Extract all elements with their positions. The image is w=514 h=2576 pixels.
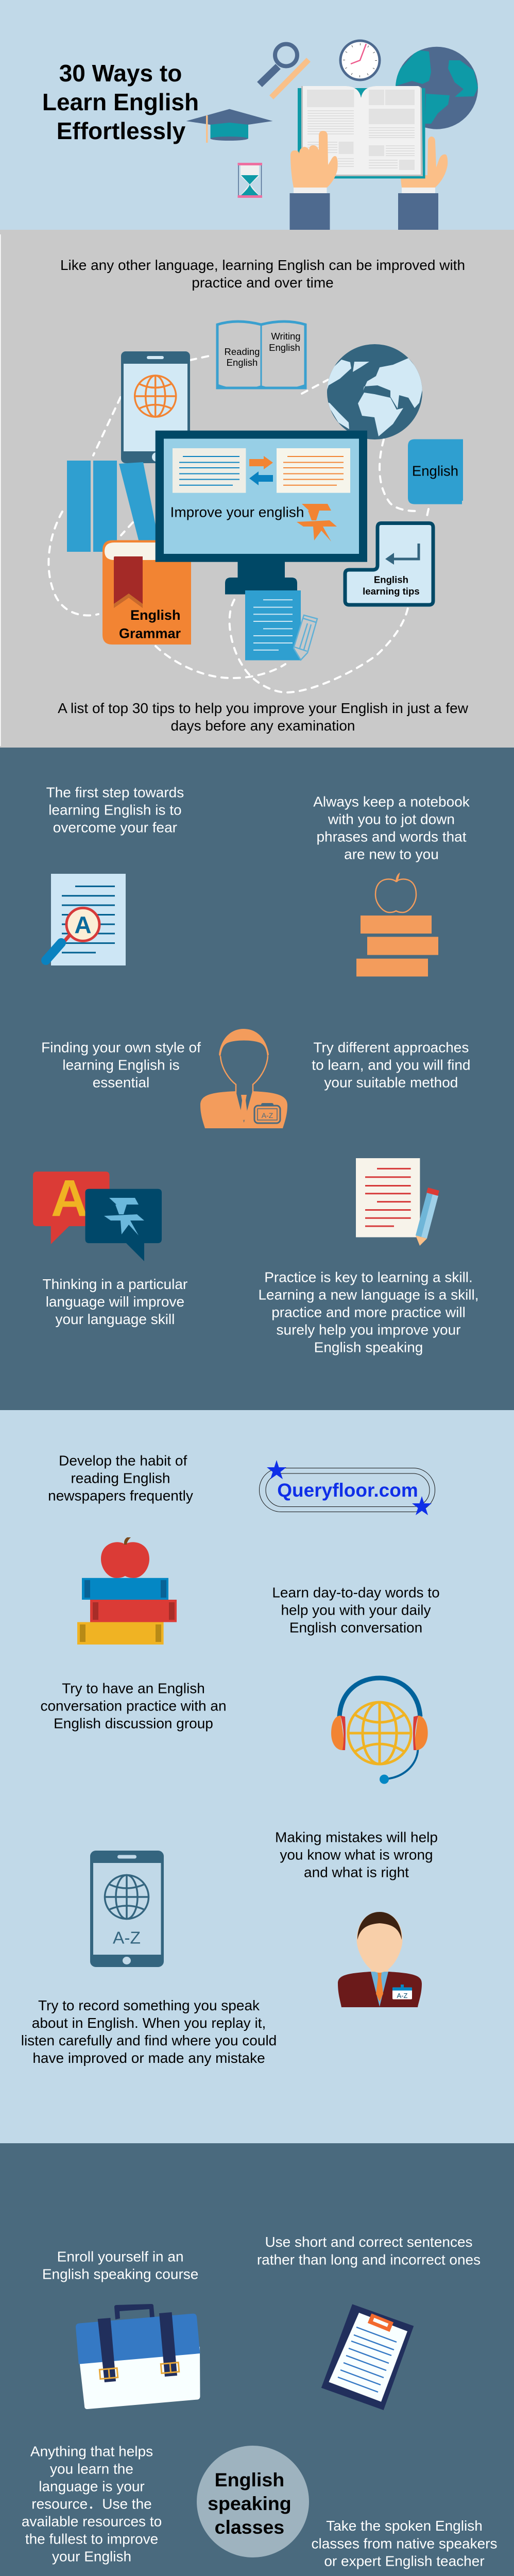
icon: open book with reading and writing labels: English xyxy=(227,357,258,368)
tip: daily words: Learn day-to-day words to xyxy=(272,1585,440,1600)
icon: briefcase xyxy=(76,2304,200,2409)
tip: newspapers: reading English xyxy=(71,1470,170,1486)
panel: header xyxy=(0,0,514,230)
tip: record yourself: about in English. When you replay it, xyxy=(32,2015,266,2031)
tip: notebook xyxy=(313,793,470,862)
tip: resources: your English xyxy=(52,2548,131,2565)
tip: practice: practice and more practice will xyxy=(271,1304,466,1320)
icon: enter key with learning tips xyxy=(345,523,433,605)
icon: headset with globe xyxy=(331,1678,428,1784)
logo: Queryfloor: Queryfloor.com xyxy=(277,1480,418,1501)
tip: practice: English speaking xyxy=(314,1340,423,1355)
translation documents on screen xyxy=(173,448,350,493)
logo: Queryfloor xyxy=(260,1460,435,1515)
tip: notebook: Always keep a notebook xyxy=(313,793,470,810)
icon: computer monitor xyxy=(156,431,367,595)
tip: record yourself: Try to record something you speak xyxy=(38,1997,260,2013)
intro text: practice and over time xyxy=(192,275,334,291)
icon: open book xyxy=(298,86,425,178)
icon: speech bubbles xyxy=(33,1170,162,1261)
tip: discussion group: Try to have an English xyxy=(62,1681,205,1696)
tip: practice xyxy=(258,1269,479,1355)
tip: thinking: Thinking in a particular xyxy=(43,1276,187,1292)
tip: practice: Learning a new language is a skill, xyxy=(258,1287,479,1302)
callout: English speaking classes: classes xyxy=(215,2516,284,2538)
intro text: Like any other language, learning English can be improved with xyxy=(60,257,465,273)
tip: mistakes: you know what is wrong xyxy=(280,1846,433,1863)
icon: open book with reading and writing labels: Reading xyxy=(225,346,260,357)
dashed connector paths xyxy=(48,355,429,692)
icon: document with magnifier: A xyxy=(74,911,92,938)
icon: enter key with learning tips: English xyxy=(374,574,408,585)
closing text: days before any examination xyxy=(171,718,355,734)
tip: resources: you learn the xyxy=(50,2461,133,2477)
icon: open book with reading and writing labels: English xyxy=(269,342,300,353)
icon: document with magnifier xyxy=(46,874,126,965)
tip: thinking: your language skill xyxy=(55,1311,175,1327)
icon: magnifying glass xyxy=(260,44,297,84)
icon: left hand xyxy=(290,131,338,188)
tip: record yourself: have improved or made any mistake xyxy=(32,2050,265,2066)
icon: English grammar book: English xyxy=(130,607,180,623)
tip: own style: Finding your own style of xyxy=(41,1040,201,1055)
tip: daily words xyxy=(272,1585,440,1635)
tip: notebook: phrases and words that xyxy=(316,828,467,845)
tip: overcome fear: learning English is to xyxy=(48,802,182,818)
icon: teacher silhouette: A-Z xyxy=(262,1111,273,1120)
icon: ruler xyxy=(271,60,309,97)
tip: discussion group: conversation practice with an xyxy=(40,1698,227,1714)
tip: enroll: English speaking course xyxy=(42,2266,198,2282)
tip: thinking xyxy=(43,1276,187,1327)
tip: mistakes: Making mistakes will help xyxy=(275,1829,438,1845)
tip: resources: Anything that helps xyxy=(30,2443,153,2460)
tip: short sentences: rather than long and incorrect ones xyxy=(257,2251,481,2268)
intro text xyxy=(60,257,465,291)
icon: standing books xyxy=(67,461,160,552)
tip: overcome fear xyxy=(46,784,184,836)
tip: resources: resource．Use the xyxy=(31,2496,152,2512)
icon: English blue book: English xyxy=(412,463,458,479)
icon: world globe xyxy=(322,344,427,439)
callout: English speaking classes: English xyxy=(215,2469,284,2490)
tip: overcome fear: overcome your fear xyxy=(53,819,177,836)
tip: resources xyxy=(22,2443,162,2565)
icon: right sleeve xyxy=(398,188,438,230)
tip: enroll: Enroll yourself in an xyxy=(57,2248,184,2265)
icon: apple on books xyxy=(356,874,438,976)
icon: A-Z phone xyxy=(90,1851,164,1967)
tip: notebook: are new to you xyxy=(344,846,439,862)
panel: first tips xyxy=(0,748,514,1410)
icon: document and pencil xyxy=(245,590,317,660)
tip: record yourself: listen carefully and find where you could xyxy=(21,2032,277,2048)
icon: open book with reading and writing labels xyxy=(217,321,306,389)
tip: practice: surely help you improve your xyxy=(277,1322,460,1337)
tip: short sentences: Use short and correct sentences xyxy=(265,2234,473,2250)
icon: hourglass xyxy=(238,163,262,198)
tip: approaches: Try different approaches xyxy=(313,1040,469,1055)
icon: A-Z phone: A-Z xyxy=(113,1929,141,1947)
tip: thinking: language will improve xyxy=(46,1294,184,1310)
tip: short sentences xyxy=(257,2234,481,2268)
icon: English grammar book: Grammar xyxy=(119,625,181,641)
tip: approaches: your suitable method xyxy=(324,1075,458,1090)
tip: resources: available resources to xyxy=(22,2513,162,2530)
icon: clipboard xyxy=(321,2304,414,2410)
tip: own style xyxy=(41,1040,201,1090)
title: Learn English xyxy=(42,89,199,115)
tip: notebook: with you to jot down xyxy=(328,811,455,827)
icon: right hand xyxy=(401,137,448,188)
icon: enter key with learning tips: learning tips xyxy=(363,586,420,597)
tip: approaches xyxy=(312,1040,470,1090)
icon: tablet with globe xyxy=(121,351,190,463)
tip: enroll xyxy=(42,2248,198,2282)
title: Effortlessly xyxy=(57,117,186,144)
panel: speaking classes xyxy=(0,2143,514,2576)
tip: own style: learning English is xyxy=(62,1057,180,1073)
tip: discussion group: English discussion group xyxy=(54,1716,213,1731)
tip: record yourself xyxy=(21,1997,277,2066)
icon: clock xyxy=(340,41,380,80)
icon: English blue book xyxy=(408,439,463,504)
icon: red apple on colourful books xyxy=(77,1537,177,1645)
tip: native speakers xyxy=(311,2518,498,2569)
screen text: Improve your english xyxy=(170,504,304,520)
tip: resources: the fullest to improve xyxy=(25,2531,158,2547)
title xyxy=(42,60,199,144)
callout: English speaking classes xyxy=(197,2446,309,2557)
icon: graduation cap xyxy=(186,109,273,143)
icon: paper and pencil xyxy=(356,1158,439,1246)
tip: approaches: to learn, and you will find xyxy=(312,1057,470,1073)
closing text xyxy=(58,700,469,734)
tip: newspapers xyxy=(48,1453,193,1503)
icon: man in red suit: A-Z xyxy=(397,1992,408,1999)
title: 30 Ways to xyxy=(59,60,182,87)
tip: discussion group xyxy=(40,1681,227,1731)
tip: overcome fear: The first step towards xyxy=(46,784,184,801)
tip: daily words: help you with your daily xyxy=(281,1602,431,1618)
tip: native speakers: classes from native speakers xyxy=(311,2536,498,2551)
icon: translate glyph xyxy=(297,504,337,541)
icon: man in red suit xyxy=(338,1912,422,2007)
icon: left sleeve xyxy=(289,188,330,230)
tip: newspapers: newspapers frequently xyxy=(48,1488,193,1503)
tip: native speakers: Take the spoken English xyxy=(326,2518,483,2534)
panel: second tips xyxy=(0,1410,514,2144)
closing text: A list of top 30 tips to help you improve your English in just a few xyxy=(58,700,469,716)
tip: mistakes: and what is right xyxy=(304,1864,409,1880)
callout: English speaking classes: speaking xyxy=(208,2493,292,2514)
tip: newspapers: Develop the habit of xyxy=(59,1453,187,1468)
tip: mistakes xyxy=(275,1829,438,1880)
icon: globe xyxy=(391,47,478,129)
icon: teacher silhouette xyxy=(200,1029,287,1128)
tip: daily words: English conversation xyxy=(289,1620,422,1635)
tip: practice: Practice is key to learning a skill. xyxy=(264,1269,473,1285)
tip: own style: essential xyxy=(93,1075,149,1090)
icon: open book with reading and writing labels: Writing xyxy=(271,331,301,342)
icon: English grammar book xyxy=(102,540,191,645)
panel: introduction xyxy=(0,230,514,748)
icon: speech bubbles: A xyxy=(51,1170,88,1227)
tip: native speakers: or expert English teacher xyxy=(324,2553,485,2569)
tip: resources: language is your xyxy=(39,2478,145,2495)
